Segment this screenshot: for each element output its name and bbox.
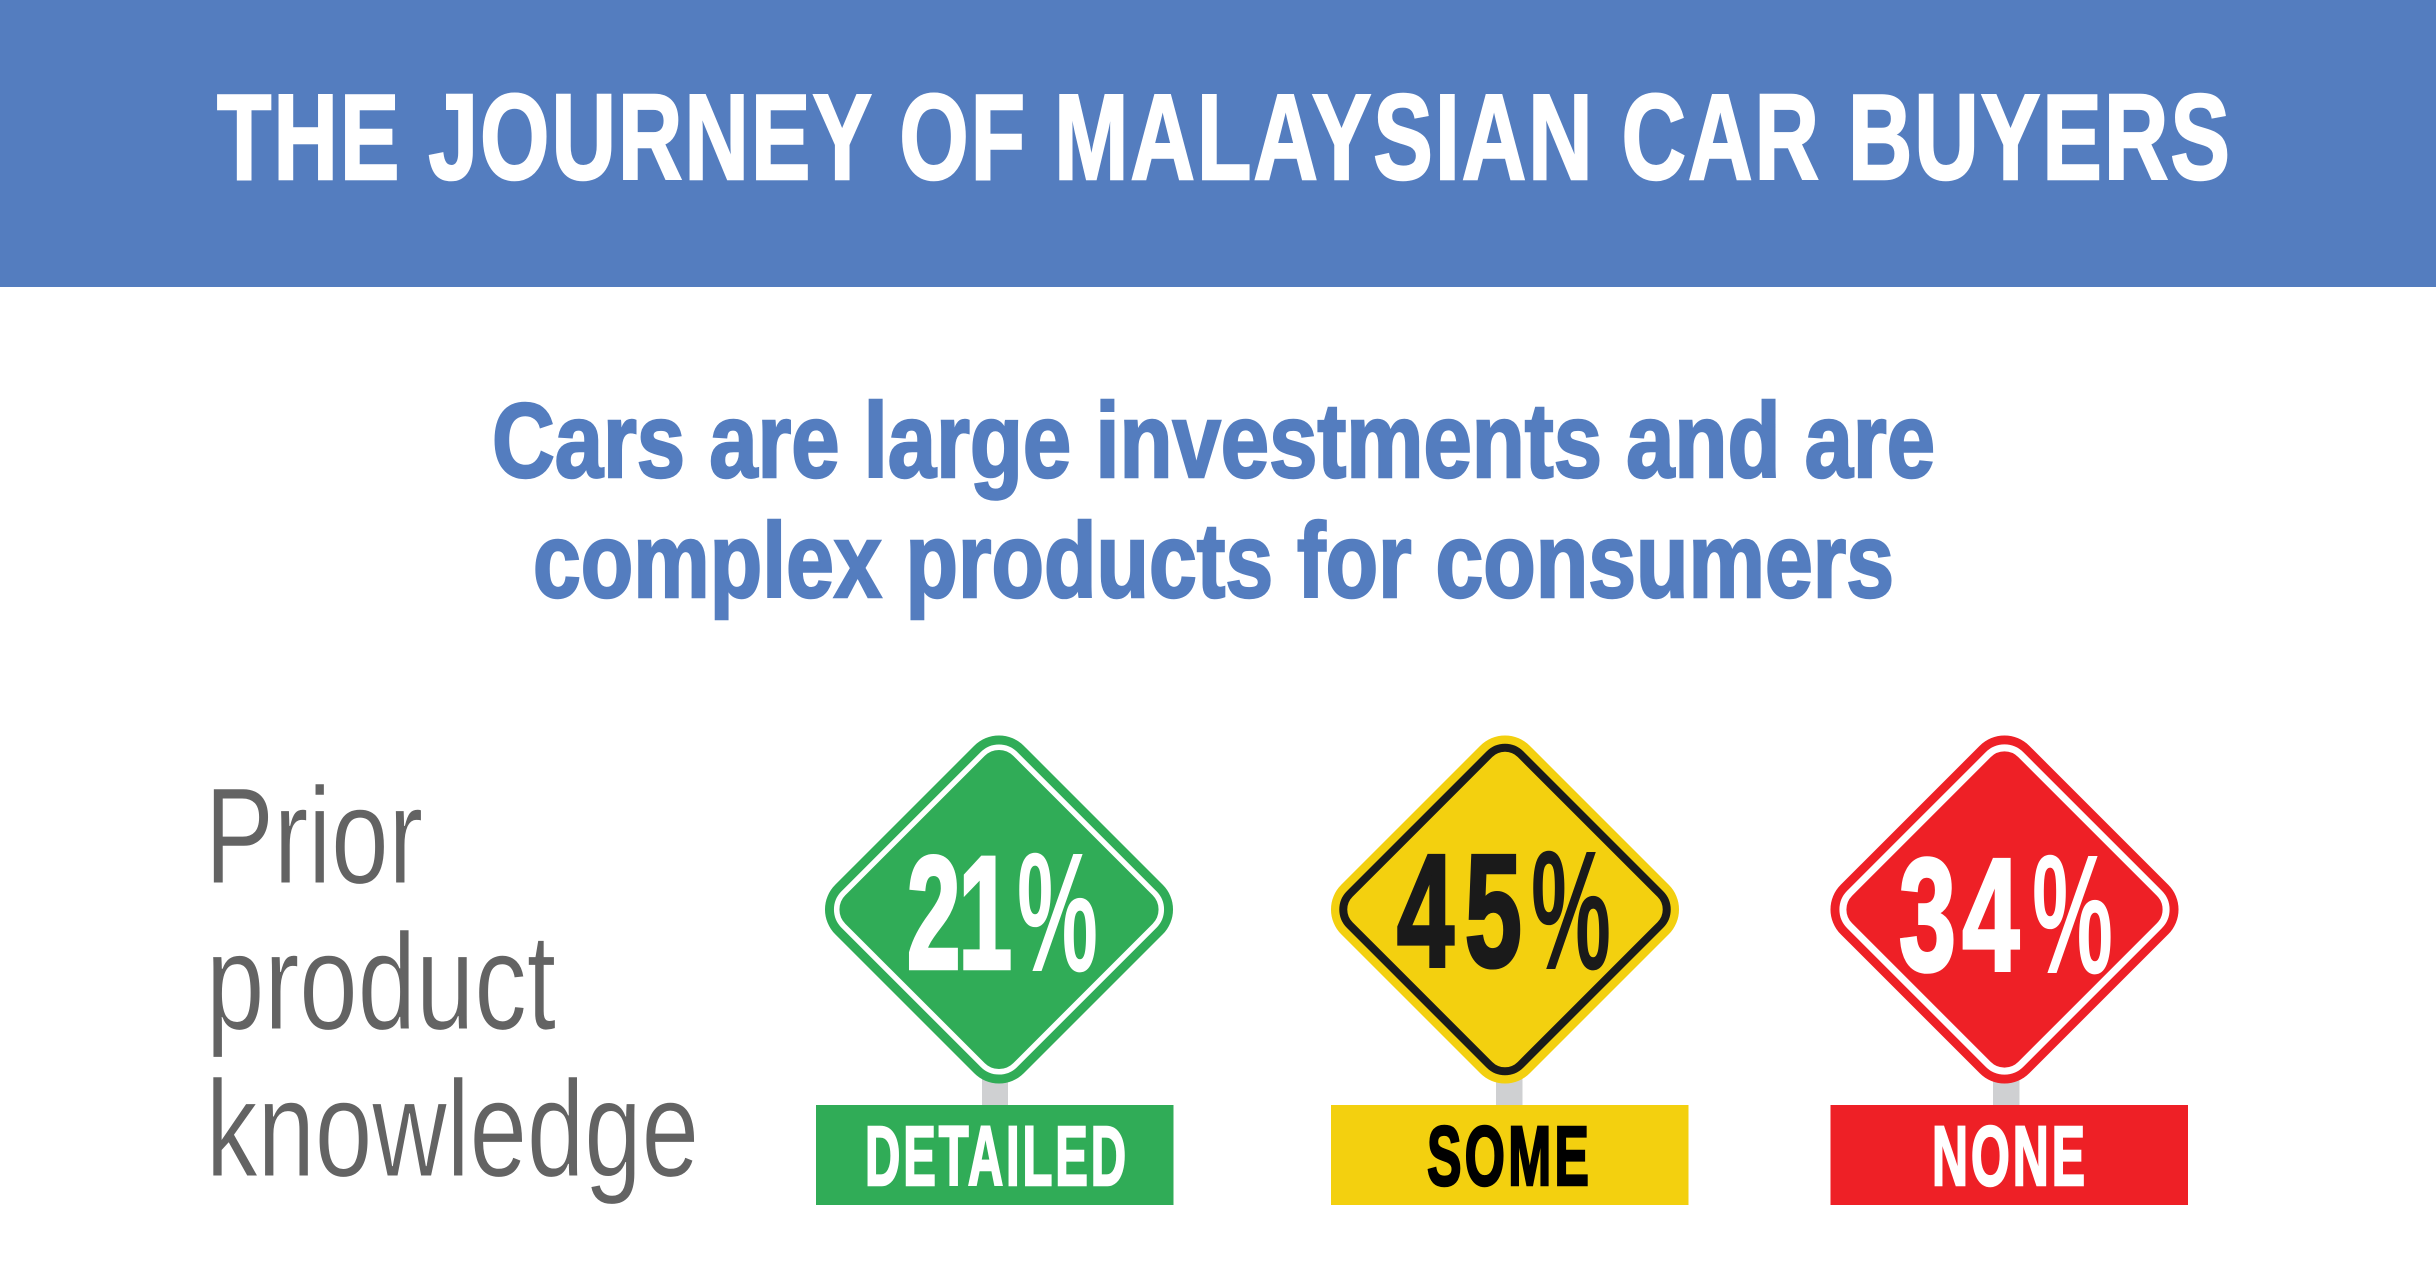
sign: detailed 21% [810, 721, 1188, 1205]
value 45% [1397, 816, 1611, 1006]
banner: none: NONE [1932, 1109, 2088, 1203]
banner: some [1331, 1105, 1688, 1205]
value 45%: 45 [1397, 822, 1522, 1001]
sign: none 34% [1816, 721, 2193, 1205]
title band [0, 0, 2436, 287]
value 21%: 21 [907, 824, 1012, 1002]
subtitle [492, 382, 1935, 620]
sign post [1496, 1075, 1522, 1107]
value 34%: % [2032, 820, 2113, 1010]
value 34% [1899, 820, 2113, 1010]
side label: prior product knowledge: product [206, 906, 556, 1059]
banner: detailed [816, 1105, 1174, 1205]
diamond [810, 721, 1188, 1098]
side label: prior product knowledge: knowledge [206, 1053, 699, 1206]
value 21%: % [1017, 818, 1098, 1008]
diamond [1316, 721, 1694, 1098]
banner: none [1830, 1105, 2188, 1205]
value 45%: % [1531, 816, 1611, 1006]
diamond [1816, 721, 2193, 1098]
subtitle: complex products for consumers [533, 502, 1894, 620]
value 34%: 34 [1899, 826, 2019, 1005]
sign: some 45% [1316, 721, 1694, 1205]
banner: some: SOME [1427, 1109, 1592, 1203]
side label: prior product knowledge [205, 760, 699, 1206]
sign post [1993, 1075, 2020, 1107]
sign post [982, 1075, 1008, 1107]
value 21% [907, 818, 1098, 1008]
banner: detailed: DETAILED [865, 1109, 1129, 1203]
side label: prior product knowledge: Prior [205, 760, 423, 913]
subtitle: Cars are large investments and are [492, 382, 1935, 500]
